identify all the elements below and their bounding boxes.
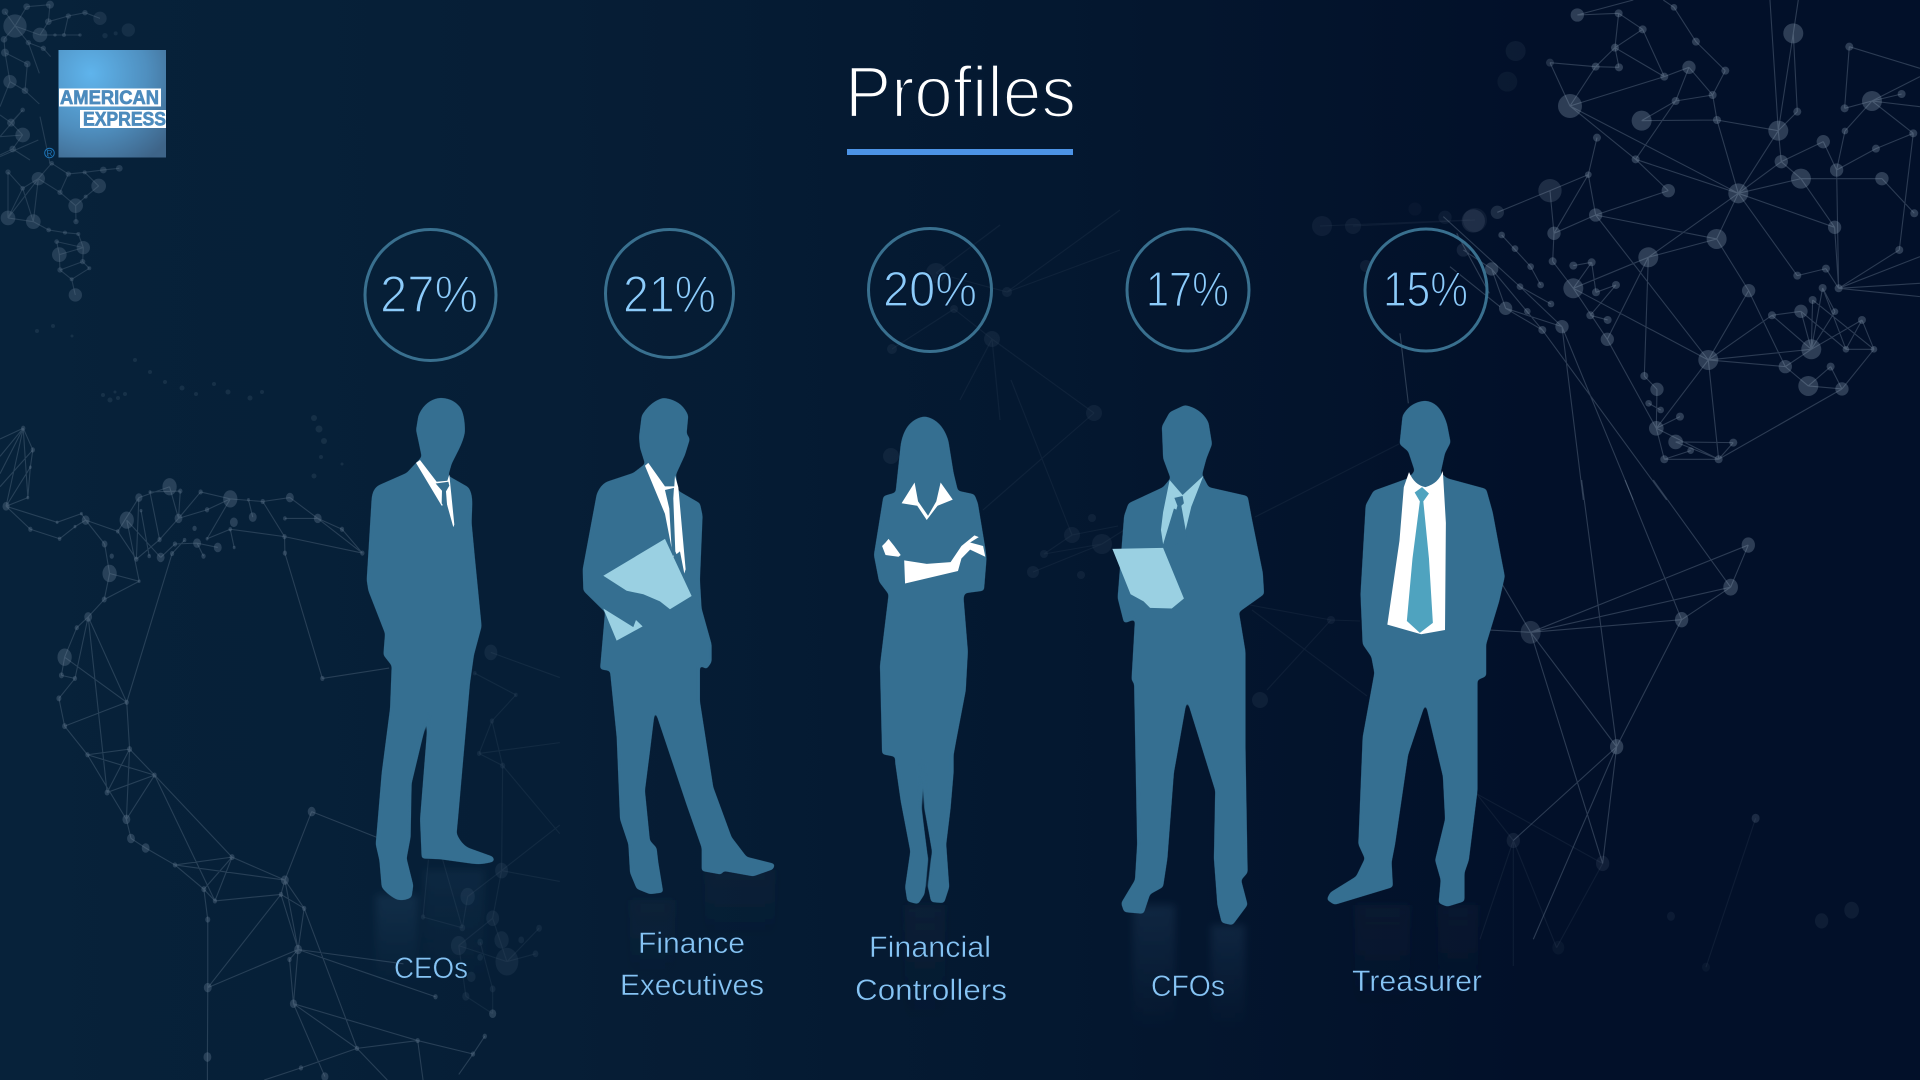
label: Finance Executives [620,927,764,1002]
figure: CEO silhouette [367,398,494,900]
logo wordmark: EXPRESS [83,110,166,130]
logo wordmark [59,88,166,130]
network map: faint centre [883,208,1487,708]
label: Finance Executives: Executives [620,969,764,1002]
title: Profiles [845,53,1076,133]
stat circle: 21%: 21% [623,266,716,324]
scattered dots left [35,324,344,478]
label: CFOs: CFOs [1151,970,1225,1003]
label: CEOs: CEOs [394,952,468,985]
figure reflections [376,870,1478,1030]
network map: lower right [1477,480,1859,972]
figure: treasurer silhouette [1327,401,1505,907]
stat circle: 15%: 15% [1383,263,1468,317]
tablet [1112,548,1184,609]
title underline [847,149,1073,155]
paper held under arm [603,539,692,609]
stat circle: 27%: 27% [380,266,478,324]
stat circle: 21% [606,230,734,358]
stat circle: 27% [365,230,496,360]
label: Financial Controllers [855,931,1007,1007]
registered mark: R [47,149,53,158]
label: Treasurer: Treasurer [1352,965,1482,998]
stat circle: 15% [1365,229,1487,351]
logo wordmark: AMERICAN [60,88,159,109]
figure: CFO silhouette [1112,405,1264,925]
label: Finance Executives: Finance [638,927,745,960]
stat circle: 17%: 17% [1146,263,1229,317]
figure: financial controller silhouette [874,416,987,904]
network map: top left [0,1,135,302]
network map: faint cluster by CEO feet [421,645,560,1014]
label: Financial Controllers: Controllers [855,974,1007,1007]
stat circle: 17% [1127,229,1249,351]
label: Financial Controllers: Financial [869,931,991,964]
figure: finance executive silhouette [583,398,775,894]
network map: Africa top right [1400,0,1920,500]
logo: American Express [45,50,166,158]
stat circle: 20%: 20% [883,263,977,317]
logo square [58,50,166,158]
stat circle: 20% [868,228,992,352]
network map: central America bottom left [0,426,496,1080]
